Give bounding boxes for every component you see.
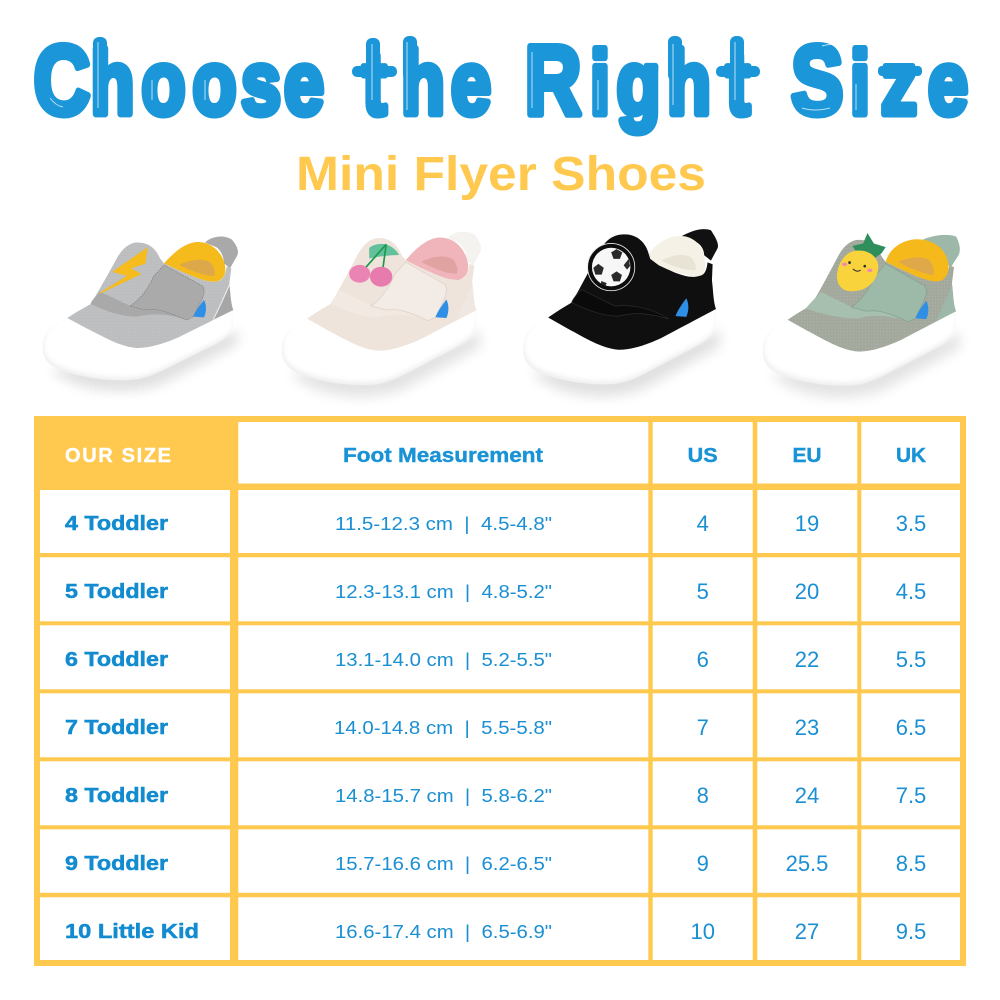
row: 4 Toddler: 3.5	[896, 511, 926, 536]
row: 7 Toddler: 23	[795, 715, 819, 740]
row: 10 Little Kid: 9.5	[896, 919, 926, 944]
row: 4 Toddler: 11.5-12.3 cm | 4.5-4.8"	[335, 513, 552, 534]
row: 6 Toddler: 6	[697, 647, 709, 672]
title: C	[34, 26, 90, 135]
row: 8 Toddler	[40, 761, 960, 825]
row: 8 Toddler: 14.8-15.7 cm | 5.8-6.2"	[335, 785, 552, 806]
size chart table	[34, 416, 966, 966]
icon: cherries	[349, 244, 399, 287]
title: ight	[590, 33, 790, 134]
row: 7 Toddler: 6.5	[896, 715, 926, 740]
title: ize	[850, 33, 968, 134]
row: 10 Little Kid: 27	[795, 919, 819, 944]
row: 4 Toddler: 4 Toddler	[65, 513, 168, 535]
title: S	[791, 26, 843, 135]
row: 5 Toddler: 5	[697, 579, 709, 604]
row: 7 Toddler: 14.0-14.8 cm | 5.5-5.8"	[334, 717, 552, 738]
row: 10 Little Kid: 10 Little Kid	[65, 921, 199, 943]
title	[34, 26, 968, 135]
title: R	[525, 26, 581, 135]
row: 4 Toddler	[40, 490, 960, 553]
header row: EU	[792, 445, 822, 467]
header row: US	[688, 445, 718, 467]
shoe: grey with lightning bolt	[43, 236, 238, 391]
header row: Foot Measurement	[343, 445, 543, 467]
row: 5 Toddler: 4.5	[896, 579, 926, 604]
row: 4 Toddler: 4	[697, 511, 709, 536]
row: 7 Toddler: 7	[697, 715, 709, 740]
row: 5 Toddler: 12.3-13.1 cm | 4.8-5.2"	[335, 581, 552, 602]
row: 8 Toddler: 7.5	[896, 783, 926, 808]
row: 8 Toddler: 24	[795, 783, 819, 808]
row: 6 Toddler: 13.1-14.0 cm | 5.2-5.5"	[335, 649, 552, 670]
row: 9 Toddler: 9 Toddler	[65, 853, 168, 875]
shoe: sage green with pineapple	[763, 233, 961, 397]
row: 9 Toddler: 8.5	[896, 851, 926, 876]
icon: pineapple	[837, 233, 886, 291]
row: 7 Toddler	[40, 693, 960, 757]
row: 10 Little Kid	[40, 897, 960, 960]
row: 5 Toddler: 5 Toddler	[65, 581, 168, 603]
row: 6 Toddler	[40, 625, 960, 689]
icon: lightning bolt	[100, 248, 147, 293]
icon: soccer ball	[588, 243, 635, 291]
row: 9 Toddler: 15.7-16.6 cm | 6.2-6.5"	[335, 853, 552, 874]
shoe: black with soccer ball	[523, 229, 721, 396]
row: 8 Toddler: 8	[697, 783, 709, 808]
row: 10 Little Kid: 10	[690, 919, 715, 944]
row: 9 Toddler	[40, 829, 960, 893]
row: 7 Toddler: 7 Toddler	[65, 717, 168, 739]
header row	[65, 422, 960, 484]
row: 6 Toddler: 5.5	[896, 647, 926, 672]
title: hoose the	[90, 33, 520, 134]
header row: UK	[896, 445, 927, 467]
row: 9 Toddler: 25.5	[786, 851, 828, 876]
row: 6 Toddler: 6 Toddler	[65, 649, 168, 671]
row: 6 Toddler: 22	[795, 647, 819, 672]
row: 5 Toddler	[40, 557, 960, 621]
subtitle: Mini Flyer Shoes	[296, 148, 706, 201]
row: 8 Toddler: 8 Toddler	[65, 785, 168, 807]
row: 10 Little Kid: 16.6-17.4 cm | 6.5-6.9"	[335, 921, 552, 942]
row: 9 Toddler: 9	[697, 851, 709, 876]
row: 4 Toddler: 19	[795, 511, 819, 536]
shoe: cream with cherries	[282, 232, 481, 397]
row: 5 Toddler: 20	[795, 579, 819, 604]
header row: OUR SIZE	[65, 445, 171, 467]
